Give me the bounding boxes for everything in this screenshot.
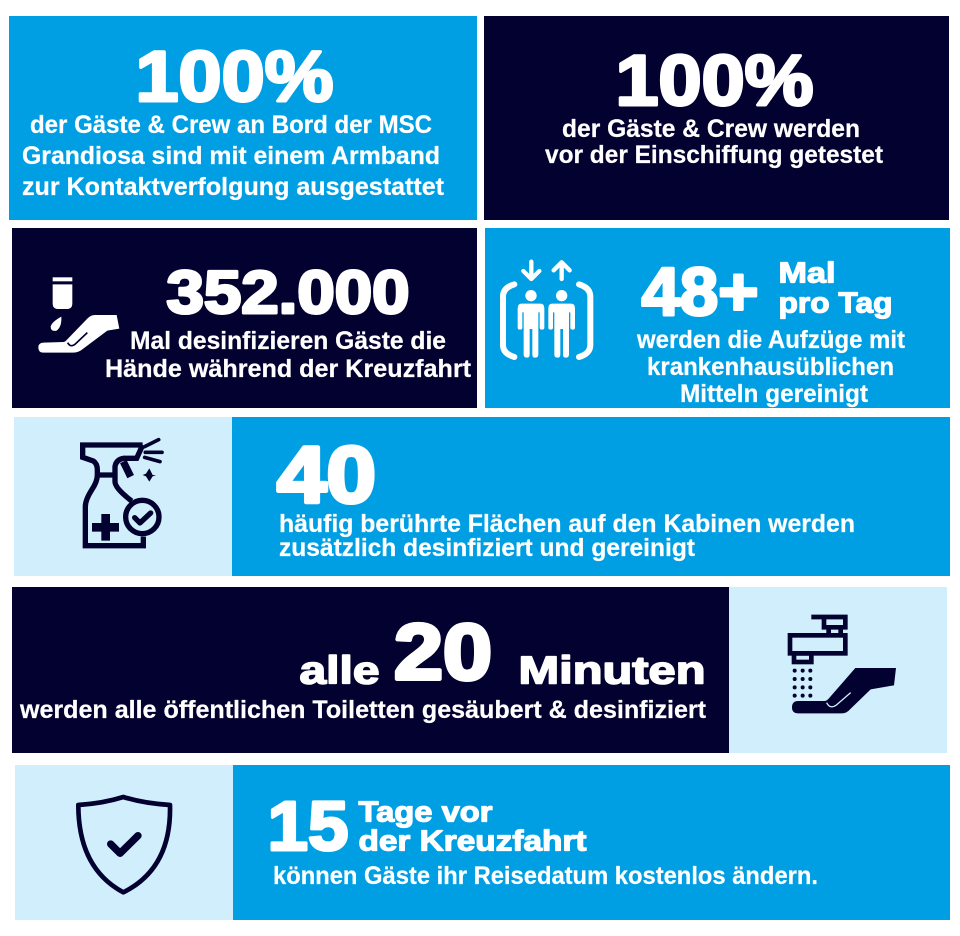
statistic: 352.000: 352.000 <box>166 259 410 326</box>
statistic: 100%: 100% <box>136 38 334 117</box>
text: disinfection description <box>105 327 472 383</box>
text: every 20 minutes: alle <box>300 650 380 692</box>
text: elevator description: Mitteln gereinigt <box>680 380 869 408</box>
icon: shield with check <box>78 797 170 892</box>
text: elevator description: werden die Aufzüge mit <box>636 326 906 354</box>
panel: cabin surfaces <box>14 417 950 576</box>
panel: elevator cleaning <box>485 228 950 408</box>
panel: testing before embarkation <box>484 16 949 220</box>
text: times per day: pro Tag <box>778 288 892 320</box>
panel: free date change <box>15 765 950 920</box>
icon: elevator with two people <box>503 262 590 358</box>
text: every 20 minutes: 20 <box>394 607 492 696</box>
text: days before the cruise: der Kreuzfahrt <box>358 826 587 858</box>
panel: bracelet for guests and crew <box>9 16 477 220</box>
statistic: 40: 40 <box>277 430 376 519</box>
text: every 20 minutes <box>300 607 706 696</box>
text: bracelet description: zur Kontaktverfolgung ausgestattet <box>22 173 445 201</box>
text: disinfection description: Hände während der Kreuzfahrt <box>105 355 472 383</box>
text: elevator description <box>636 326 906 408</box>
statistic: 15: 15 <box>268 787 348 865</box>
icon: hand sanitizer <box>38 277 119 353</box>
text: cabin surfaces description: häufig berührte Flächen auf den Kabinen werden <box>279 510 855 538</box>
panel: public toilets <box>12 587 947 753</box>
text: testing description: der Gäste & Crew werden <box>562 115 860 143</box>
text: toilets description: werden alle öffentlichen Toiletten gesäubert & desinfiziert <box>19 696 707 724</box>
text: times per day <box>778 258 892 320</box>
text: testing description: vor der Einschiffung getestet <box>545 141 884 169</box>
text: every 20 minutes: Minuten <box>518 650 706 692</box>
text: days before the cruise <box>358 796 587 858</box>
text: bracelet description <box>22 111 445 201</box>
text: days before the cruise: Tage vor <box>358 796 492 828</box>
text: bracelet description: der Gäste & Crew an Bord der MSC <box>30 111 432 139</box>
text: cabin surfaces description: zusätzlich desinfiziert und gereinigt <box>279 534 696 562</box>
text: elevator description: krankenhausüblichen <box>647 353 894 381</box>
statistic: 100%: 100% <box>616 42 814 121</box>
text: bracelet description: Grandiosa sind mit einem Armband <box>22 142 440 170</box>
text: cabin surfaces description <box>279 510 855 562</box>
text: times per day: Mal <box>778 258 836 290</box>
text: date change description: können Gäste ihr Reisedatum kostenlos ändern. <box>273 862 818 890</box>
icon: spray bottle with check <box>83 440 162 546</box>
statistic: 48+: 48+ <box>642 254 758 330</box>
icon: tap and washing hand <box>790 617 896 713</box>
text: testing description <box>545 115 884 169</box>
panel: hand disinfection <box>12 228 477 408</box>
text: disinfection description: Mal desinfizieren Gäste die <box>130 327 446 355</box>
